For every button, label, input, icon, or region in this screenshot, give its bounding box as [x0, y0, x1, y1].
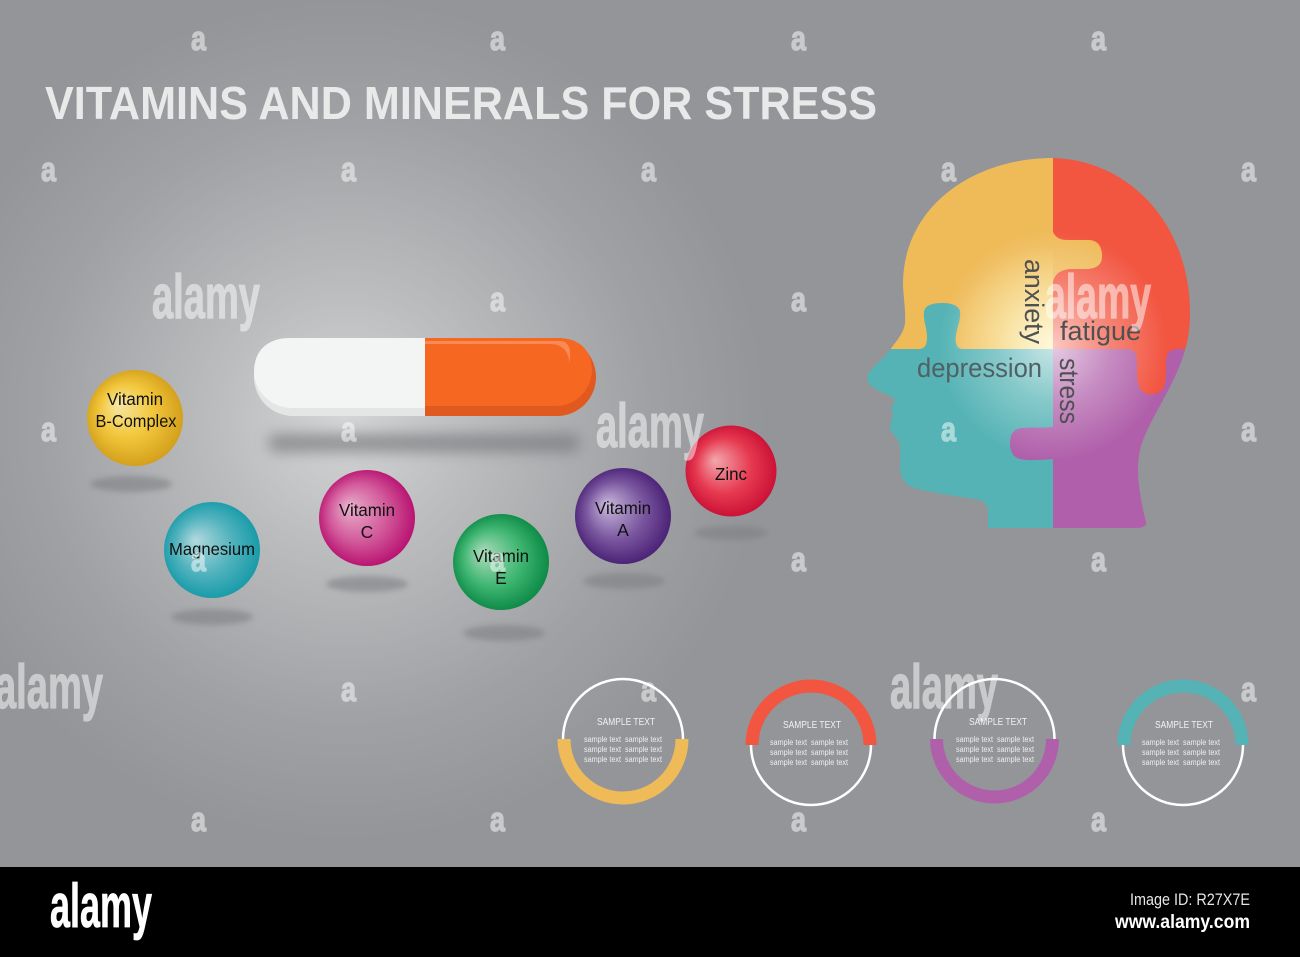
- sphere: Magnesium: Magnesium: [169, 539, 255, 559]
- watermarks: alamy: [1045, 263, 1151, 332]
- watermarks: a: [791, 801, 807, 839]
- watermarks: a: [1241, 671, 1257, 709]
- sphere: Vitamin C: Vitamin: [339, 500, 395, 520]
- sphere: Vitamin B-Complex: [87, 370, 183, 492]
- watermarks: a: [490, 20, 506, 58]
- footer bar: [0, 867, 1300, 957]
- glow: yellow piece: [956, 264, 1053, 349]
- circle: purple: sample text sample text: [956, 755, 1035, 764]
- circle: purple: [934, 679, 1054, 799]
- watermarks: a: [41, 411, 57, 449]
- puzzle piece: teal: [860, 296, 1053, 535]
- title: VITAMINS AND MINERALS FOR STRESS: [45, 77, 877, 129]
- circle: teal: SAMPLE TEXT: [1155, 720, 1213, 731]
- circle: teal: sample text sample text: [1142, 748, 1221, 757]
- watermarks: a: [490, 541, 506, 579]
- circle: red: sample text sample text: [770, 738, 849, 747]
- watermarks: a: [1241, 411, 1257, 449]
- watermarks: a: [641, 151, 657, 189]
- sphere: Vitamin E: Vitamin: [473, 546, 529, 566]
- watermarks: alamy: [152, 263, 260, 332]
- pill shadow: [268, 434, 580, 452]
- pill orange half: [425, 338, 596, 416]
- watermarks: a: [791, 281, 807, 319]
- sphere: Vitamin E: [453, 514, 549, 641]
- watermarks: a: [191, 801, 207, 839]
- sphere: Vitamin C: C: [361, 522, 373, 542]
- watermarks: alamy: [596, 392, 704, 461]
- watermarks: a: [490, 281, 506, 319]
- pill white half: [254, 338, 425, 416]
- capsule pill: [254, 338, 596, 452]
- watermarks: alamy: [0, 653, 103, 722]
- watermarks: a: [341, 151, 357, 189]
- website: www.alamy.com: [1114, 912, 1250, 933]
- watermarks: a: [191, 20, 207, 58]
- sphere: Vitamin A: Vitamin: [595, 498, 651, 518]
- watermarks: a: [1241, 151, 1257, 189]
- watermarks: a: [641, 671, 657, 709]
- sphere: Vitamin A: A: [617, 520, 629, 540]
- watermarks: a: [791, 541, 807, 579]
- sphere: Vitamin A: [575, 468, 671, 589]
- label: anxiety: anxiety: [1019, 259, 1049, 344]
- sphere: Magnesium: [164, 502, 260, 625]
- circle: teal: sample text sample text: [1142, 738, 1221, 747]
- circle: red: sample text sample text: [770, 758, 849, 767]
- circle: yellow: sample text sample text: [584, 745, 663, 754]
- sphere: Zinc: [686, 426, 776, 540]
- puzzle piece: yellow: [880, 150, 1102, 349]
- puzzle piece: red: [1053, 150, 1200, 394]
- circle: yellow: [563, 679, 683, 799]
- watermarks: alamy: [890, 653, 998, 722]
- vitamin and mineral spheres: [87, 370, 776, 641]
- label: stress: stress: [1054, 358, 1084, 424]
- sphere: Vitamin B-Complex: B-Complex: [96, 411, 177, 431]
- sphere: Zinc: Zinc: [715, 464, 747, 484]
- label: depression: depression: [917, 353, 1042, 383]
- circle: yellow: sample text sample text: [584, 735, 663, 744]
- sphere: Vitamin E: E: [495, 568, 507, 588]
- watermarks: a: [490, 801, 506, 839]
- watermarks: a: [1091, 801, 1107, 839]
- watermarks: a: [1091, 20, 1107, 58]
- watermarks: a: [341, 671, 357, 709]
- circle: purple: sample text sample text: [956, 745, 1035, 754]
- sphere: Vitamin B-Complex: Vitamin: [107, 389, 163, 409]
- label: fatigue: fatigue: [1060, 316, 1141, 346]
- watermarks: a: [941, 151, 957, 189]
- watermarks: a: [341, 411, 357, 449]
- circle: red: [751, 685, 871, 805]
- circle: yellow: SAMPLE TEXT: [597, 717, 655, 728]
- watermarks: a: [41, 151, 57, 189]
- puzzle head: [860, 150, 1200, 535]
- circle: purple: sample text sample text: [956, 735, 1035, 744]
- watermarks: a: [1091, 541, 1107, 579]
- watermarks: a: [191, 541, 207, 579]
- puzzle piece: purple: [1010, 345, 1186, 528]
- image id: Image ID: R27X7E: [1130, 890, 1250, 909]
- circle: red: sample text sample text: [770, 748, 849, 757]
- watermarks: a: [791, 20, 807, 58]
- circle: purple: SAMPLE TEXT: [969, 717, 1027, 728]
- circle: red: SAMPLE TEXT: [783, 720, 841, 731]
- sphere: Vitamin C: [319, 470, 415, 592]
- circle: teal: [1123, 685, 1243, 805]
- sample text circles: [563, 679, 1243, 805]
- circle: yellow: sample text sample text: [584, 755, 663, 764]
- glow: center highlight: [948, 240, 1159, 449]
- circle: teal: sample text sample text: [1142, 758, 1221, 767]
- footer logo: alamy: [50, 872, 152, 941]
- watermarks: a: [941, 411, 957, 449]
